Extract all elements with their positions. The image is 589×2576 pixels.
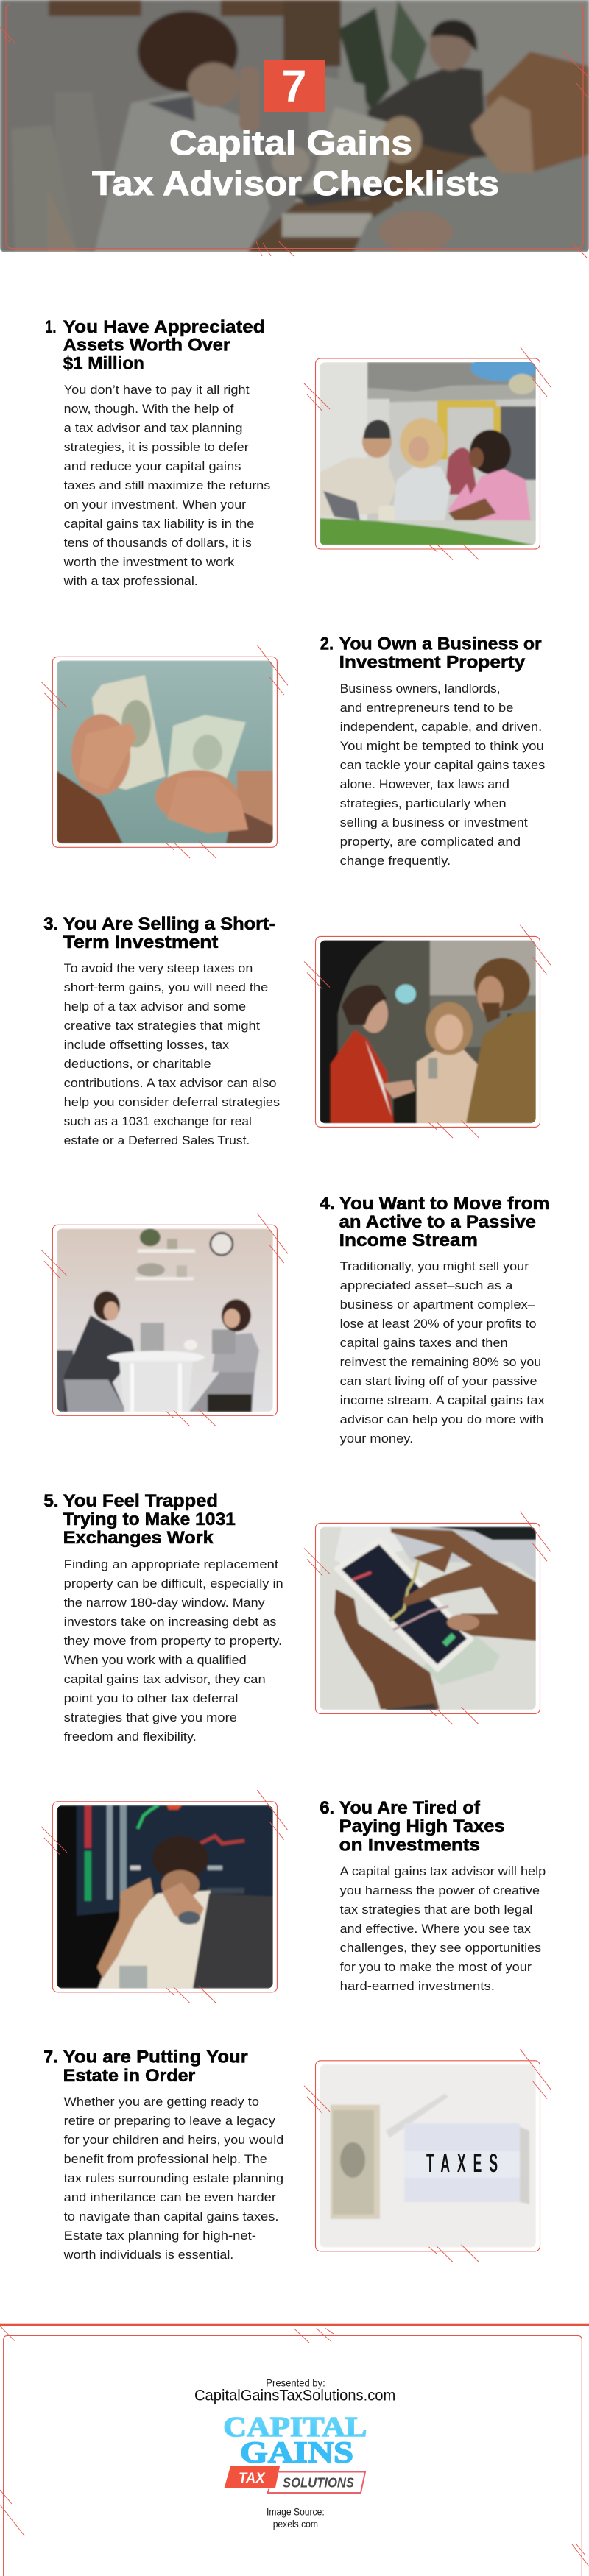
photo card: stressed man in front of trading screen: [41, 1790, 288, 2003]
body text 5: Finding an appropriate replacement: [64, 1558, 278, 1571]
body text 4: business or apartment complex–: [340, 1298, 536, 1312]
heading 4: an Active to a Passive: [339, 1212, 536, 1232]
heading 1: $1 Million: [63, 353, 144, 374]
body text 1: capital gains tax liability is in the: [64, 517, 254, 531]
body text 6: for you to make the most of your: [340, 1961, 532, 1974]
heading 6: You Are Tired of: [339, 1798, 481, 1818]
logo: Capital Gains Tax Solutions: SOLUTIONS: [283, 2476, 354, 2491]
panel: item 2: [41, 634, 545, 868]
header banner: [0, 0, 589, 258]
body text 3: creative tax strategies that might: [64, 1019, 260, 1033]
body text 4: your money.: [340, 1432, 413, 1446]
heading 5: Exchanges Work: [63, 1528, 214, 1548]
photo card: hands holding cash: [41, 645, 288, 858]
photo card: hands using phone with stock chart: [304, 1512, 551, 1724]
body text 3: include offsetting losses, tax: [64, 1038, 230, 1052]
body text 6: hard-earned investments.: [340, 1980, 495, 1993]
body text 7: retire or preparing to leave a legacy: [64, 2115, 276, 2128]
body text 5: [64, 1558, 283, 1744]
body text 7: and inheritance can be even harder: [64, 2191, 277, 2204]
body text 2: change frequently.: [340, 854, 451, 868]
body text 5: When you work with a qualified: [64, 1654, 247, 1667]
body text 1: strategies, it is possible to defer: [64, 441, 249, 454]
body text 5: investors take on increasing debt as: [64, 1616, 276, 1629]
heading 1: You Have Appreciated: [63, 317, 265, 337]
title: Tax Advisor Checklists: [92, 164, 499, 202]
footer accent slashes: [0, 2326, 589, 2566]
panel: item 7: [43, 2048, 551, 2262]
body text 2: property, are complicated and: [340, 835, 521, 849]
heading 4: Income Stream: [339, 1231, 478, 1250]
heading 5: [43, 1491, 236, 1548]
heading 6: 6.: [320, 1798, 334, 1818]
body text 2: [340, 682, 545, 868]
body text 3: short-term gains, you will need the: [64, 981, 268, 994]
body text 1: You don’t have to pay it all right: [64, 383, 250, 397]
heading 4: You Want to Move from: [339, 1194, 549, 1214]
body text 6: challenges, they see opportunities: [340, 1942, 541, 1955]
body text 7: for your children and heirs, you would: [64, 2134, 283, 2147]
heading 6: [320, 1798, 505, 1855]
body text 2: can tackle your capital gains taxes: [340, 759, 545, 772]
heading 6: Paying High Taxes: [339, 1816, 505, 1836]
heading 3: 3.: [43, 914, 58, 934]
body text 7: Whether you are getting ready to: [64, 2095, 259, 2109]
photo card: colleagues at office table: [304, 347, 551, 560]
image source url: pexels.com: [273, 2519, 318, 2530]
logo: Capital Gains Tax Solutions: CAPITAL: [223, 2412, 367, 2443]
body text 1: a tax advisor and tax planning: [64, 422, 243, 435]
body text 1: worth the investment to work: [63, 556, 235, 569]
heading 7: 7.: [43, 2048, 58, 2067]
hero inner border: [6, 4, 583, 249]
body text 7: benefit from professional help. The: [64, 2153, 267, 2166]
body text 2: alone. However, tax laws and: [340, 778, 509, 791]
footer: [0, 2324, 589, 2576]
photo card: dollar bills and TAXES lightbox: [304, 2049, 551, 2262]
heading 6: on Investments: [339, 1835, 480, 1855]
heading 5: You Feel Trapped: [63, 1491, 218, 1511]
body text 4: Traditionally, you might sell your: [340, 1260, 529, 1273]
heading 2: Investment Property: [339, 653, 526, 673]
body text 5: freedom and flexibility.: [64, 1730, 197, 1744]
body text 4: capital gains taxes and then: [340, 1337, 508, 1350]
logo: Capital Gains Tax Solutions: [223, 2412, 367, 2493]
panel: item 5: [43, 1491, 551, 1744]
body text 3: [64, 962, 280, 1147]
heading 2: You Own a Business or: [339, 634, 542, 654]
heading 4: [320, 1194, 549, 1250]
body text 7: worth individuals is essential.: [63, 2248, 233, 2262]
panel: item 4: [41, 1194, 549, 1446]
body text 3: estate or a Deferred Sales Trust.: [64, 1134, 250, 1147]
body text 3: To avoid the very steep taxes on: [64, 962, 253, 975]
heading 2: [320, 634, 542, 673]
heading 2: 2.: [320, 634, 334, 654]
heading 3: Term Investment: [63, 933, 218, 952]
heading 1: [45, 317, 265, 374]
photo card: three people talking: [304, 925, 551, 1138]
title: [92, 124, 499, 202]
heading 4: 4.: [320, 1194, 335, 1214]
body text 5: property can be difficult, especially in: [64, 1577, 283, 1590]
heading 7: You are Putting Your: [63, 2048, 248, 2067]
hero photo background: [0, 0, 589, 252]
body text 6: and effective. Where you see tax: [340, 1922, 532, 1936]
body text 5: strategies that give you more: [64, 1711, 237, 1724]
body text 3: such as a 1031 exchange for real: [64, 1115, 252, 1128]
presented by: Presented by:: [266, 2377, 325, 2388]
body text 6: A capital gains tax advisor will help: [340, 1865, 546, 1878]
body text 6: tax strategies that are both legal: [340, 1903, 532, 1917]
body text 3: help you consider deferral strategies: [64, 1096, 280, 1109]
body text 4: [340, 1260, 546, 1446]
body text 1: tens of thousands of dollars, it is: [64, 537, 252, 550]
body text 3: contributions. A tax advisor can also: [64, 1077, 276, 1090]
body text 4: advisor can help you do more with: [340, 1413, 543, 1426]
body text 4: income stream. A capital gains tax: [340, 1394, 546, 1407]
body text 4: can start living off of your passive: [340, 1375, 537, 1388]
logo: Capital Gains Tax Solutions: GAINS: [240, 2435, 353, 2469]
logo: Capital Gains Tax Solutions: TAX: [239, 2470, 266, 2486]
body text 6: you harness the power of creative: [340, 1884, 540, 1897]
panel: item 1: [45, 317, 551, 588]
body text 7: Estate tax planning for high-net-: [64, 2229, 256, 2243]
heading 3: [43, 914, 275, 952]
body text 2: strategies, particularly when: [340, 797, 507, 810]
body text 5: the narrow 180-day window. Many: [64, 1596, 266, 1610]
body text 4: reinvest the remaining 80% so you: [340, 1356, 541, 1369]
body text 2: independent, capable, and driven.: [340, 721, 542, 734]
website: CapitalGainsTaxSolutions.com: [194, 2388, 395, 2405]
body text 1: on your investment. When your: [64, 498, 247, 512]
body text 4: lose at least 20% of your profits to: [340, 1317, 536, 1331]
body text 2: You might be tempted to think you: [340, 740, 544, 753]
body text 1: now, though. With the help of: [64, 403, 234, 416]
body text 7: to navigate than capital gains taxes.: [64, 2210, 278, 2223]
body text 3: help of a tax advisor and some: [64, 1000, 246, 1013]
body text 5: they move from property to property.: [64, 1635, 282, 1648]
body text 4: appreciated asset–such as a: [340, 1279, 513, 1292]
image source label: Image Source:: [267, 2506, 325, 2517]
number badge 7: 7: [282, 61, 306, 111]
heading 1: Assets Worth Over: [63, 336, 230, 355]
footer accent bar: [0, 2324, 589, 2326]
hero accent slashes: [0, 27, 589, 258]
body text 2: and entrepreneurs tend to be: [340, 701, 513, 715]
panel: item 6: [41, 1790, 546, 2003]
body text 2: Business owners, landlords,: [340, 682, 501, 696]
body text 1: with a tax professional.: [63, 575, 198, 588]
body text 2: selling a business or investment: [340, 816, 528, 829]
heading 7: Estate in Order: [63, 2066, 196, 2086]
heading 7: [43, 2048, 248, 2086]
heading 3: You Are Selling a Short-: [63, 914, 275, 934]
lightbox label: TAXES: [426, 2148, 498, 2177]
body text 1: taxes and still maximize the returns: [64, 479, 270, 492]
body text 5: capital gains tax advisor, they can: [64, 1673, 266, 1686]
number badge 7: [264, 60, 325, 112]
body text 7: [63, 2095, 283, 2262]
body text 6: [340, 1865, 546, 1993]
photo card: two women at a white table: [41, 1214, 288, 1426]
body text 3: deductions, or charitable: [64, 1058, 211, 1071]
title: Capital Gains: [169, 124, 412, 162]
heading 5: 5.: [43, 1491, 59, 1511]
body text 5: point you to other tax deferral: [64, 1692, 238, 1705]
body text 1: [63, 383, 270, 588]
footer border: [4, 2335, 582, 2576]
heading 1: 1.: [45, 317, 56, 337]
body text 7: tax rules surrounding estate planning: [64, 2172, 283, 2185]
panel: item 3: [43, 914, 551, 1147]
body text 1: and reduce your capital gains: [64, 460, 241, 473]
heading 5: Trying to Make 1031: [63, 1510, 236, 1529]
